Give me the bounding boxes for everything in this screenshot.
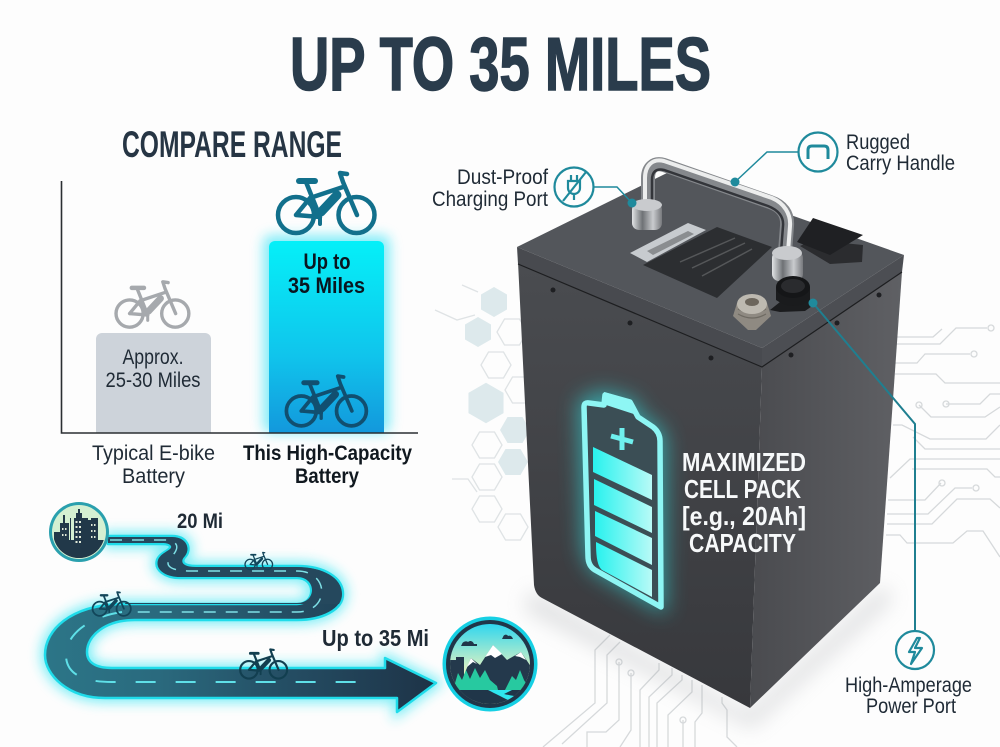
bar: typical battery [96, 333, 211, 433]
label text: Dust-Proof [457, 166, 548, 189]
bar: high-capacity battery: 35 Miles [288, 273, 365, 298]
icon: handle [798, 132, 838, 172]
icon: small bike 1 [245, 552, 273, 570]
shadow under battery [525, 585, 892, 728]
callout: maximized cell pack: CAPACITY [689, 528, 796, 558]
background circuit and hexagon pattern [435, 285, 1000, 747]
callout: maximized cell pack [682, 447, 806, 558]
label text [846, 131, 955, 175]
bar: typical battery: Approx. [122, 346, 184, 369]
label text: Charging Port [432, 188, 548, 211]
battery left face [518, 262, 762, 708]
bar: typical battery: 25-30 Miles [106, 369, 200, 392]
icon: small bike 3 [240, 649, 287, 679]
road glow [45, 536, 436, 712]
icon: teal bike above bar [278, 173, 374, 233]
lane markings: upper [110, 540, 322, 612]
handle mount right [772, 246, 803, 281]
handle mount left [632, 199, 662, 230]
handle [645, 160, 790, 252]
label: 20 Mi: 20 Mi [177, 510, 223, 533]
title: UP TO 35 MILES [290, 22, 711, 106]
callout: maximized cell pack: CELL PACK [684, 474, 801, 504]
icon: small bike 2 [93, 592, 131, 616]
callout: dust-proof charging port [432, 166, 636, 211]
leader line [813, 303, 915, 631]
axis label: typical: Battery [122, 465, 185, 488]
leader line [735, 152, 799, 182]
label text [432, 166, 548, 211]
icon: dark bike in bar [286, 376, 366, 426]
road with arrowhead [45, 536, 436, 712]
icon: crossed plug [554, 168, 594, 206]
screws [550, 288, 882, 360]
callout: rugged carry handle [730, 131, 955, 186]
panel: compare range chart [62, 124, 418, 488]
battery right face [750, 272, 902, 708]
label: Up to 35 Mi: Up to 35 Mi [322, 625, 429, 651]
callout: maximized cell pack: MAXIMIZED [682, 447, 806, 477]
chart heading: COMPARE RANGE [122, 124, 342, 165]
label text [845, 674, 972, 718]
black charging port [770, 276, 815, 312]
lane markings: lower [66, 612, 375, 682]
chart axes [62, 181, 418, 433]
callout: maximized cell pack: [e.g., 20Ah] [682, 501, 806, 531]
icon: lightning bolt [896, 631, 934, 669]
label text: Power Port [866, 695, 956, 718]
battery top face [517, 172, 904, 348]
label plate [643, 227, 772, 298]
icon: glowing battery gauge [578, 390, 666, 615]
axis label: high-capacity: This High-Capacity [243, 442, 412, 465]
label text: Carry Handle [846, 152, 955, 175]
bar: high-capacity battery [263, 235, 390, 433]
axis label: high-capacity [243, 442, 412, 488]
metal power terminal [733, 294, 771, 330]
callout: high-amperage power port [808, 298, 972, 718]
leader line [594, 187, 632, 203]
bar: high-capacity battery: Up to [304, 249, 350, 274]
axis label: typical: Typical E-bike [92, 442, 215, 465]
port cover [797, 218, 863, 264]
route graphic [45, 502, 538, 712]
battery pack product [517, 160, 904, 728]
axis label: typical [92, 442, 215, 488]
icon: grey bike [116, 282, 189, 327]
upper road section [108, 537, 342, 604]
label text: Rugged [846, 131, 910, 154]
icon: city circle [49, 502, 109, 562]
axis label: high-capacity: Battery [295, 465, 359, 488]
label text: High-Amperage [845, 674, 972, 697]
leader dot [808, 298, 818, 308]
icon: destination mountain circle [442, 616, 538, 712]
leader dot [730, 178, 740, 186]
leader dot [628, 198, 636, 208]
